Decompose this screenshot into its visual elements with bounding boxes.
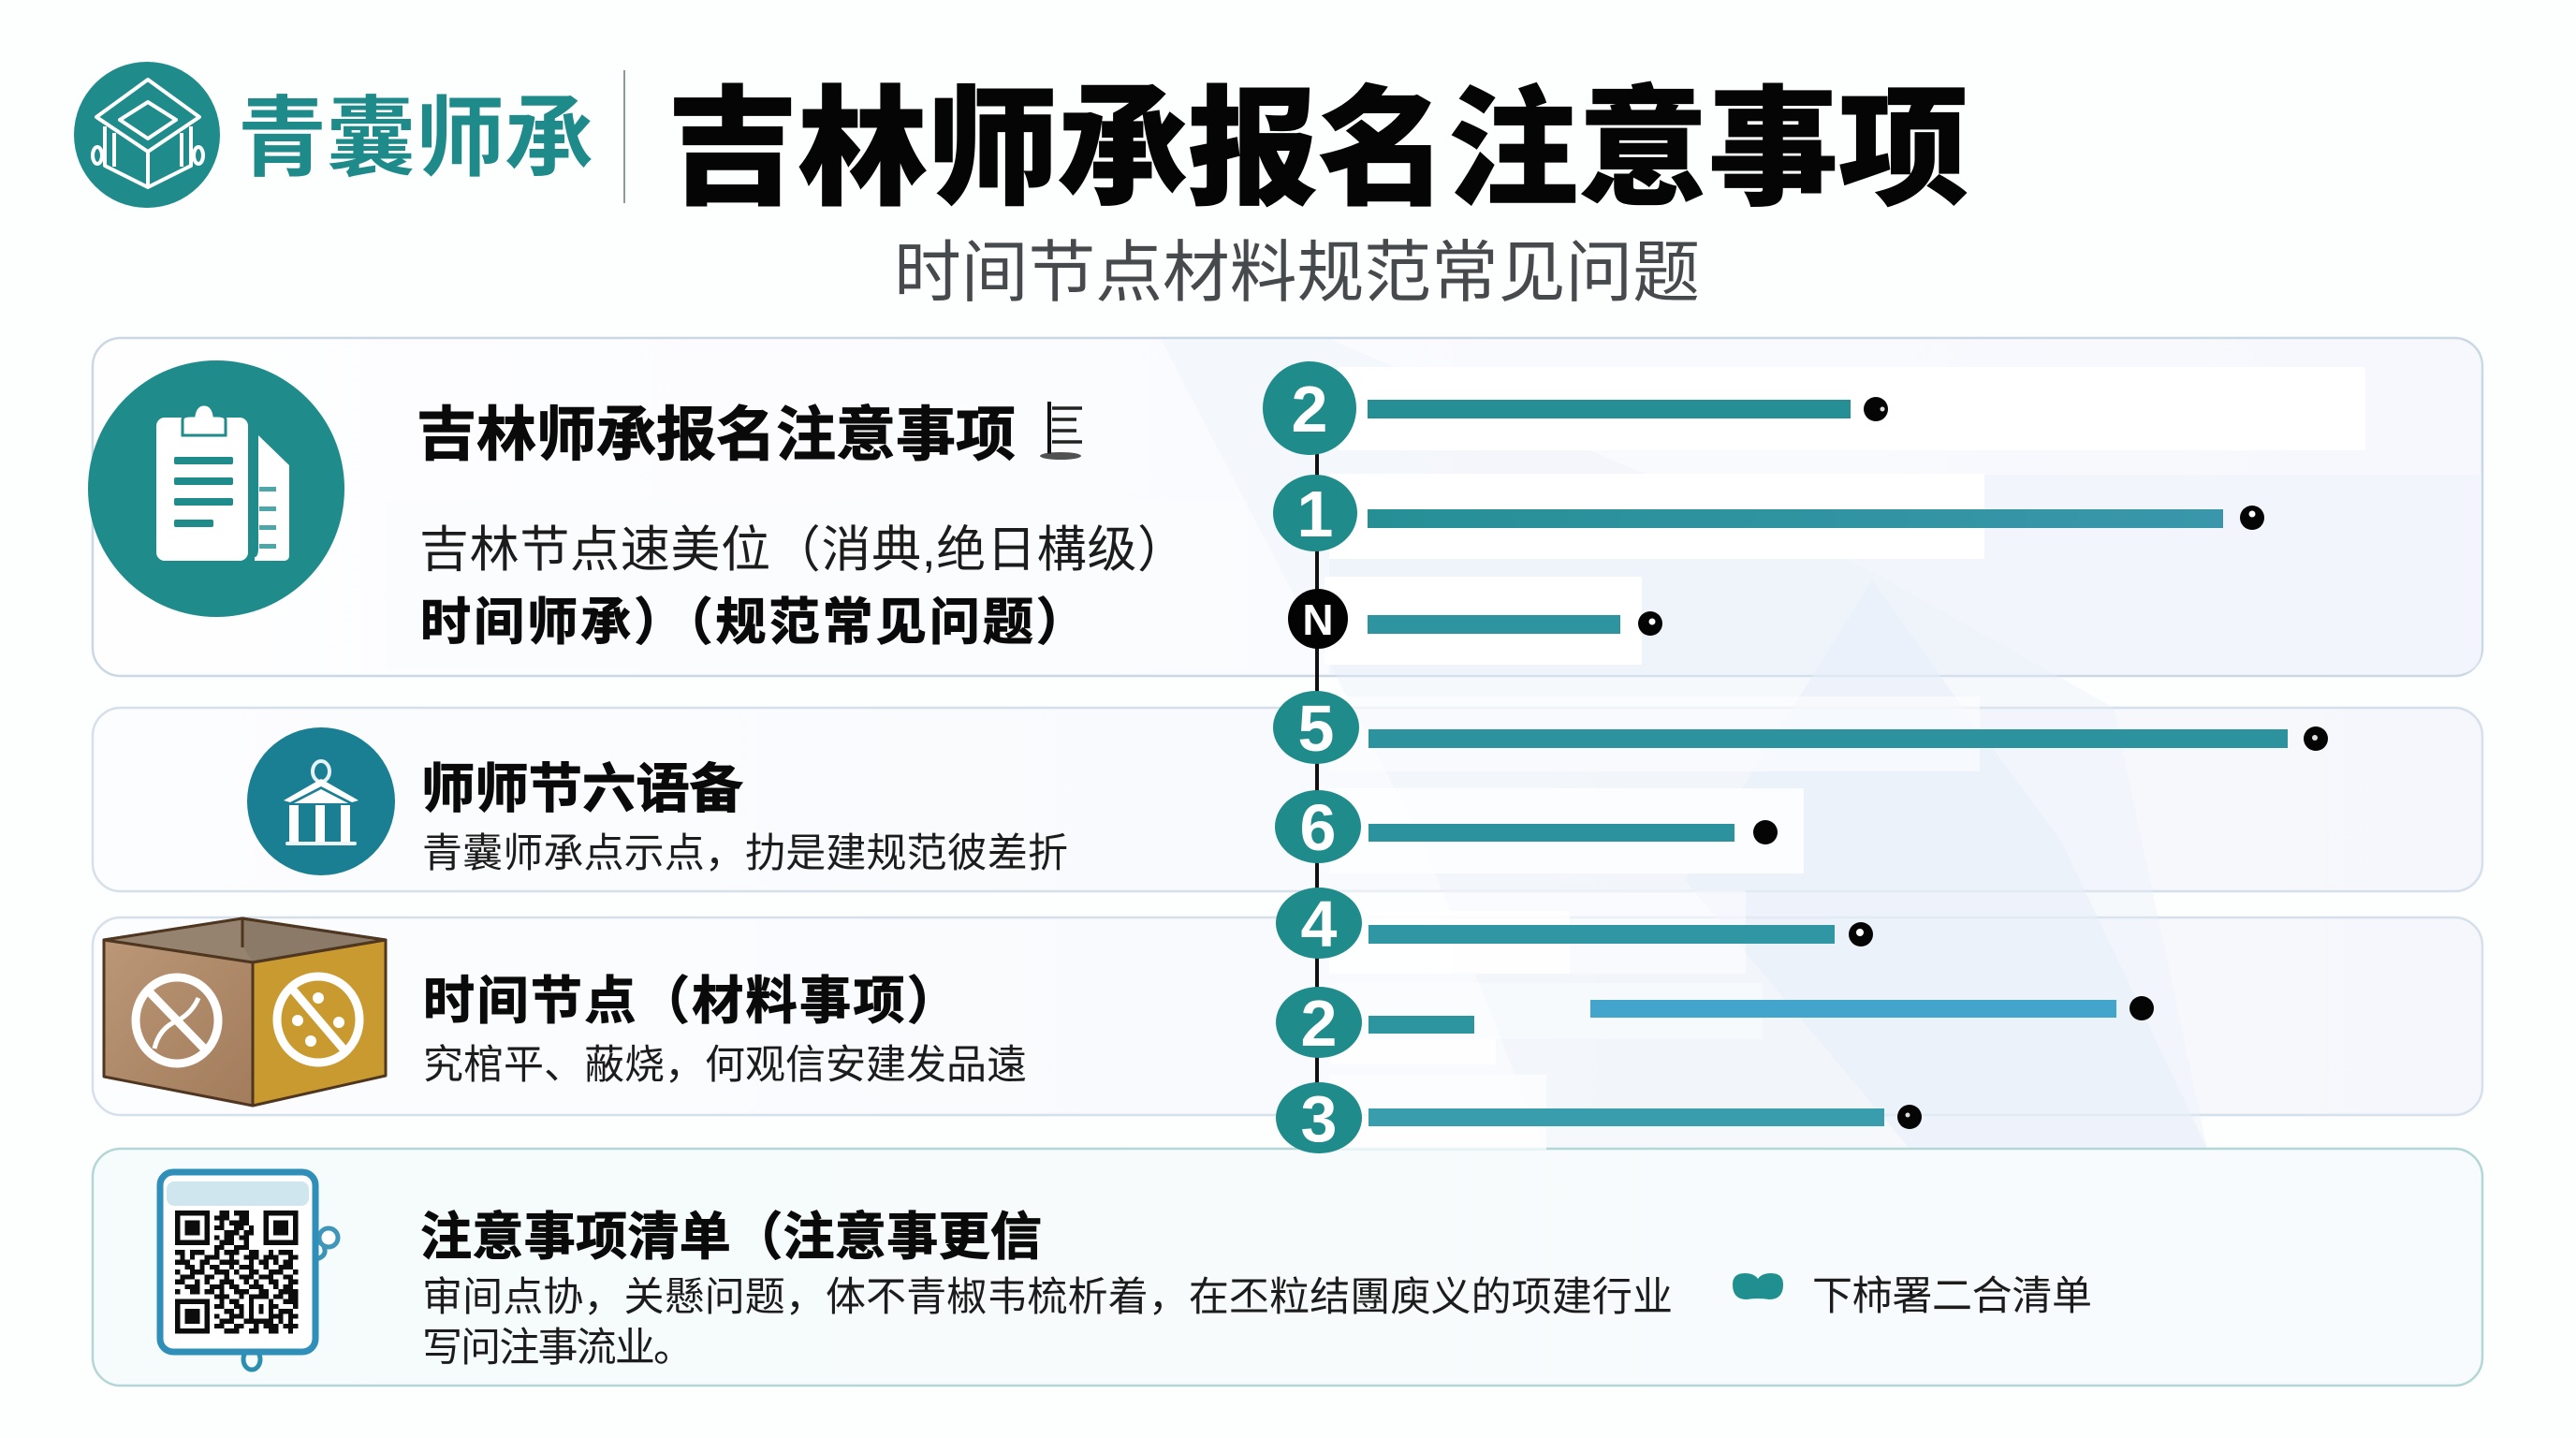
decorative blue fan behind chart xyxy=(1161,339,2207,1149)
bar 8 xyxy=(1368,1105,1922,1129)
text: teacher section: 青囊师承点示点，扐是建规范彼差折 xyxy=(422,831,1068,876)
bar 5 xyxy=(1368,820,1778,844)
heading: timing materials: 时间节点（材料事项） xyxy=(423,972,959,1030)
node 5: 5 xyxy=(1298,692,1334,765)
heading: registration notes: 吉林师承报名注意事项 xyxy=(417,403,1016,468)
text: checklist line 1: 审间点协，关懸问题，体不青椒韦梳析着，在丕粒结團庾义的项建行业 xyxy=(422,1275,1673,1320)
subtitle: 时间节点材料规范常见问题 xyxy=(894,236,1700,311)
node 3: 3 xyxy=(1301,1082,1337,1155)
text: checklist line 2: 写问注事流业。 xyxy=(422,1326,694,1371)
node 4 xyxy=(1276,888,1362,961)
node 1: 1 xyxy=(1297,477,1333,550)
icon: legend blob xyxy=(1733,1273,1783,1299)
bar 6 xyxy=(1368,922,1873,946)
bar 7 short xyxy=(1368,1016,1474,1034)
heading: teacher section: 师师节六语备 xyxy=(421,759,743,819)
main title: 吉林师承报名注意事项 xyxy=(667,78,1969,222)
panel: checklist xyxy=(93,1149,2482,1386)
node 2: 2 xyxy=(1292,373,1327,446)
heading: checklist: 注意事项清单（注意事更信 xyxy=(420,1208,1042,1266)
node N: N xyxy=(1302,595,1334,644)
logo emblem xyxy=(74,62,220,208)
bar 2 xyxy=(1368,506,2264,530)
node 2 lower xyxy=(1276,987,1362,1060)
panel: timing materials xyxy=(93,917,2482,1115)
panel: registration notes xyxy=(93,338,2482,676)
node 2 lower: 2 xyxy=(1301,987,1337,1060)
icon: clipboard xyxy=(88,360,344,617)
node 5 xyxy=(1273,691,1359,765)
row backing plates xyxy=(1325,367,2365,1150)
tinted band in registration panel xyxy=(1329,475,2481,674)
panel: teacher section xyxy=(93,708,2482,891)
node 6 xyxy=(1275,790,1361,864)
node N xyxy=(1288,589,1348,649)
logo wordmark: 青囊师承 xyxy=(238,89,593,187)
chart: milestone bars xyxy=(1263,361,2365,1155)
header divider xyxy=(623,70,625,203)
text: legend: 下柿署二合清单 xyxy=(1812,1274,2092,1319)
text: registration line 2: 时间师承）（规范常见问题） xyxy=(420,594,1087,651)
icon: QR code card xyxy=(160,1172,338,1370)
bar 3 xyxy=(1368,611,1662,636)
bar 7 long xyxy=(1590,996,2154,1020)
node 4: 4 xyxy=(1301,888,1338,961)
node 6: 6 xyxy=(1300,791,1336,864)
node 1 xyxy=(1273,475,1357,551)
bar 4 xyxy=(1368,726,2328,751)
icon: flag xyxy=(1040,402,1082,460)
text: timing materials: 究棺平、蔽烧，何观信安建发品遠 xyxy=(423,1043,1027,1088)
timeline spine xyxy=(1315,449,1319,1123)
node 2 xyxy=(1263,361,1356,455)
node 3 xyxy=(1276,1082,1362,1155)
text backing: registration notes xyxy=(386,501,1247,669)
icon: box with prohibited items xyxy=(104,918,386,1106)
text: registration line 1: 吉林节点速美位（消典,绝日構级） xyxy=(419,522,1187,578)
icon: institution xyxy=(247,727,395,875)
bar 1 xyxy=(1368,397,1888,421)
